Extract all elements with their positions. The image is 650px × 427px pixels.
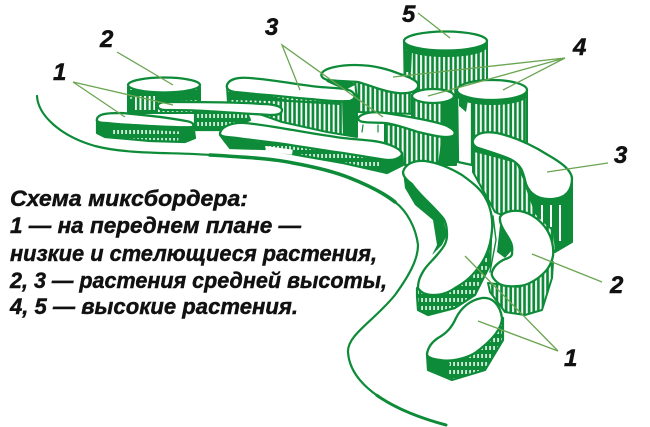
bed 3: right kidney: [473, 132, 572, 252]
caption text block: Схема миксбордера:: [10, 186, 248, 211]
bed 3: long diagonal bed: [220, 123, 403, 173]
label 1 right: 1: [564, 345, 577, 372]
bed 5: tall plants: [404, 32, 487, 104]
bed 3: centre bed: [358, 112, 456, 165]
bed 2: rear oval: [128, 78, 200, 113]
caption text block: 4, 5 — высокие растения.: [9, 294, 298, 319]
caption text block: низкие и стелющиеся растения,: [10, 241, 377, 266]
bed 1: lower right: [427, 298, 503, 380]
bed 4: small round: [412, 89, 457, 165]
bed: large left kidney: [403, 161, 492, 315]
garden path edges: [37, 96, 446, 425]
caption text block: [9, 186, 387, 319]
label 1 left: 1: [53, 59, 66, 86]
label 3 right: 3: [614, 142, 628, 169]
caption text block: 1 — на переднем плане —: [10, 213, 302, 238]
bed 4: large round: [457, 80, 527, 165]
caption text block: 2, 3 — растения средней высоты,: [9, 268, 387, 293]
bed 1: front left: [97, 113, 195, 142]
label 2 left: 2: [99, 26, 114, 53]
label 2 right: 2: [609, 272, 624, 299]
label 3 top: 3: [265, 14, 279, 41]
bed 2: right kidney: [488, 211, 553, 315]
label 4: 4: [572, 34, 586, 61]
bed 1: long narrow bed: [158, 102, 282, 130]
bed 3: back blob: [321, 65, 418, 114]
leader lines: [73, 13, 608, 351]
bed 3: rear long bed: [227, 78, 357, 137]
label 5: 5: [402, 1, 416, 28]
